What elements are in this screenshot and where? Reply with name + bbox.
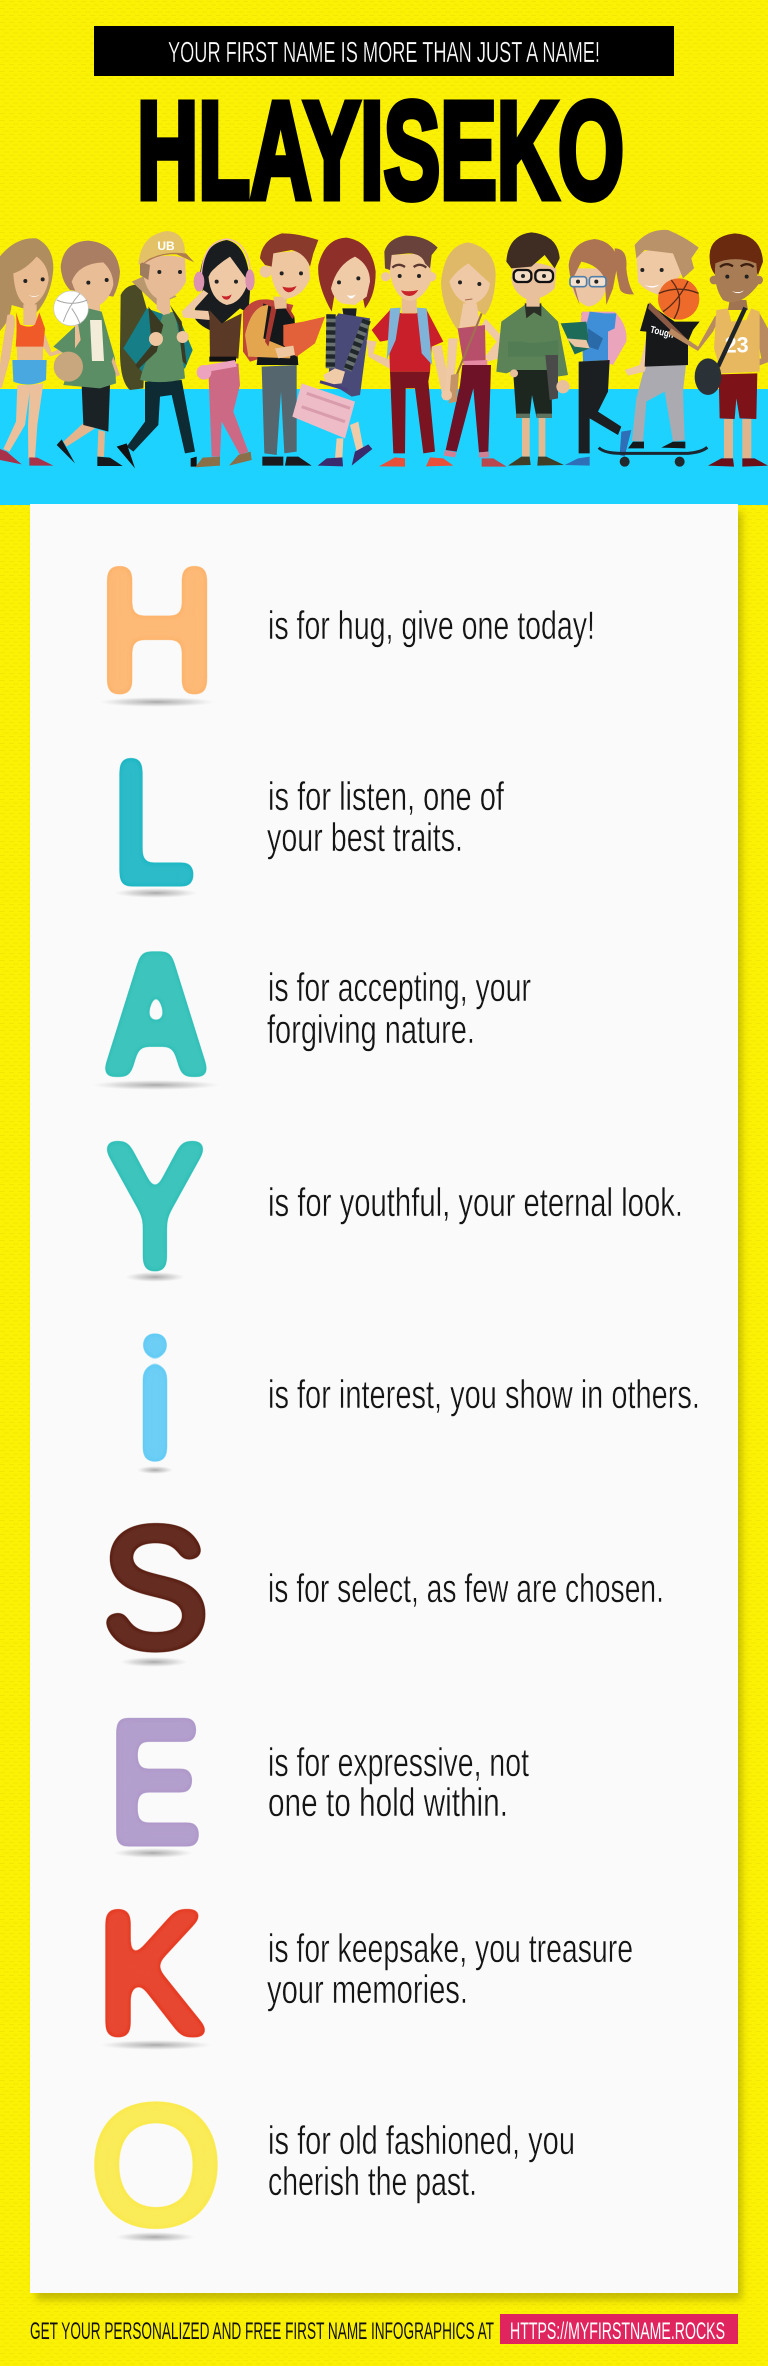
person 6: red-haired girl with pink bag — [292, 238, 376, 466]
person 7: boy in red shirt — [367, 236, 453, 467]
letter Y: Y — [107, 1111, 203, 1302]
person 1: girl in orange top — [0, 238, 82, 466]
row A — [92, 919, 531, 1109]
row E: one to hold within. — [268, 1781, 508, 1825]
row E — [109, 1686, 529, 1877]
row H — [99, 535, 595, 726]
row I — [137, 1309, 700, 1492]
person 8: blonde girl — [441, 242, 507, 467]
text A: is for accepting, your — [268, 966, 531, 1010]
person 5: boy with book — [243, 233, 325, 466]
letter E: E — [109, 1686, 201, 1877]
text H: is for hug, give one today! — [268, 604, 595, 648]
letter H: H — [99, 535, 215, 726]
letter S: S — [101, 1491, 209, 1684]
person 3: boy with cap and backpack — [117, 231, 197, 468]
person 9: boy with glasses — [496, 232, 570, 466]
row K — [97, 1878, 633, 2069]
person 11: skater with basketball — [625, 230, 700, 448]
top banner — [94, 26, 674, 76]
text O: is for old fashioned, you — [268, 2119, 575, 2163]
person 11: skater with basketball: Tough — [649, 325, 675, 341]
row O: cherish the past. — [268, 2160, 477, 2204]
letter K: K — [97, 1878, 205, 2069]
row L — [112, 727, 505, 917]
panel: letter meanings — [30, 504, 742, 2300]
text K: is for keepsake, you treasure — [268, 1927, 633, 1971]
illustration: group of people — [0, 230, 768, 468]
person 4: girl with headphones — [182, 239, 255, 467]
person 12: boy in tank top — [668, 233, 768, 467]
person 2: girl with volleyball — [53, 241, 123, 466]
row A: forgiving nature. — [267, 1008, 475, 1052]
person 12: boy in tank top: 23 — [725, 332, 749, 357]
person 10: ponytail girl with tablet — [561, 239, 634, 466]
letter O: O — [91, 2071, 221, 2259]
row Y — [107, 1111, 683, 1302]
letter A: A — [103, 919, 209, 1109]
person 3: boy with cap and backpack: UB — [157, 239, 175, 253]
letter L: L — [112, 727, 194, 917]
blue floor band — [0, 389, 768, 505]
text L: is for listen, one of — [268, 775, 505, 819]
letter i: i — [137, 1309, 173, 1492]
row K: your memories. — [267, 1968, 468, 2012]
skateboard — [599, 447, 707, 467]
row O — [91, 2071, 575, 2259]
text E: is for expressive, not — [268, 1741, 529, 1785]
row S — [101, 1491, 664, 1684]
row L: your best traits. — [267, 816, 463, 860]
